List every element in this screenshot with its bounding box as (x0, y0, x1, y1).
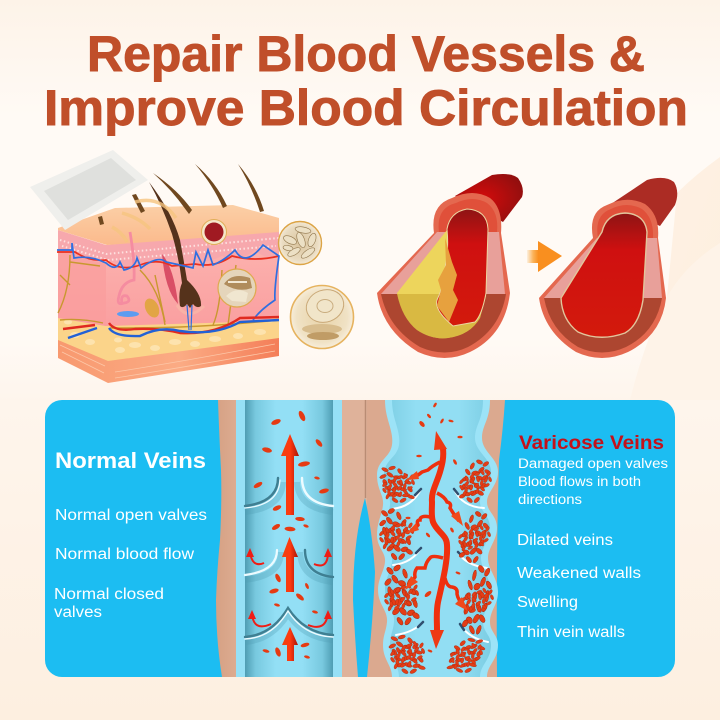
outer wall (377, 193, 510, 358)
valve shadows (245, 482, 333, 642)
branch arrow heads (405, 471, 468, 611)
normal closed valves: Normal closed (54, 586, 164, 603)
cut wall left (544, 238, 603, 298)
small curved side arrows (250, 552, 328, 627)
transdermal arrows (112, 200, 176, 242)
bulging vein interior (384, 400, 491, 677)
vein wall (236, 400, 342, 677)
cell clusters (379, 459, 494, 675)
back tube (611, 178, 677, 226)
left skin (216, 400, 236, 677)
sweat duct (118, 232, 134, 304)
lumen (561, 213, 647, 337)
follicle vessels (187, 305, 192, 330)
title: Improve Blood Circulation (44, 80, 688, 136)
blue gap between legs (353, 498, 375, 677)
artery before: plaque (377, 174, 523, 358)
herb circle: saffron (202, 220, 226, 244)
cut wall right (642, 238, 662, 298)
panel background (45, 400, 675, 677)
thin vein walls: Thin vein walls (517, 624, 625, 641)
right leg skin (367, 400, 505, 677)
herb circle: ginseng slices (290, 284, 354, 348)
plaque shade (397, 294, 486, 338)
weakened walls: Weakened walls (517, 565, 641, 582)
cut wall right (486, 232, 505, 294)
title (44, 26, 688, 136)
orange arrow (527, 241, 562, 272)
branch arrows (408, 462, 464, 606)
skin left face shade (58, 245, 106, 326)
back tube (455, 174, 523, 222)
bulging vein wall (377, 400, 498, 677)
large up arrow 3 (282, 627, 298, 661)
herb circle: mushroom (218, 269, 256, 307)
muscle fibres (60, 344, 275, 378)
main arrow heads (430, 431, 447, 649)
normal vein leg illustration (216, 400, 392, 677)
fat globules (64, 318, 274, 353)
skin cross-section diagram (57, 164, 279, 383)
deep red vessel (63, 317, 279, 333)
cut wall left (381, 232, 447, 294)
inner muscle top (597, 205, 653, 238)
inner muscle bottom (381, 294, 506, 352)
skin band specks (60, 238, 279, 260)
lumen (437, 209, 488, 326)
normal closed valves: valves (54, 604, 102, 621)
swelling: Swelling (517, 594, 578, 611)
large up arrow 2 (282, 537, 298, 592)
normal open valves: Normal open valves (55, 507, 207, 524)
skin pink band (58, 228, 279, 268)
inner muscle bottom (544, 298, 662, 352)
capillaries red (57, 252, 279, 268)
capillaries blue (57, 243, 279, 320)
fat lobule (142, 296, 162, 320)
large up arrow 1 (281, 434, 299, 515)
skin fat layer (58, 312, 279, 361)
damaged valves description: Blood flows in both (518, 474, 641, 489)
normal blood flow: Normal blood flow (55, 546, 195, 563)
title: Repair Blood Vessels & (87, 26, 645, 82)
inner muscle top (439, 199, 497, 232)
centre skin (342, 400, 392, 677)
hairs (98, 164, 264, 225)
damaged valves description: directions (518, 492, 582, 507)
panel text: varicose veins (517, 432, 668, 641)
valves (245, 478, 333, 639)
normal veins heading: Normal Veins (55, 448, 206, 473)
varicose veins heading: Varicose Veins (519, 432, 664, 454)
nerve ending (117, 311, 139, 317)
outer wall (539, 200, 666, 358)
patch (30, 150, 148, 230)
leg divider (364, 400, 366, 498)
plaque (397, 230, 486, 338)
herb circle: sliced root (278, 222, 322, 264)
damaged valves description: Damaged open valves (518, 456, 668, 471)
skin muscle layer (58, 336, 279, 383)
main wavy arrow (432, 449, 447, 630)
skin epidermis top (58, 205, 279, 245)
nerves (58, 255, 279, 328)
artery after: clear (539, 178, 677, 358)
sebaceous gland (162, 254, 178, 304)
panel text: normal veins (54, 448, 207, 621)
damaged valves (392, 489, 488, 642)
deep blue vessel (68, 320, 279, 338)
main hair follicle (149, 182, 201, 308)
dilated veins: Dilated veins (517, 532, 613, 549)
vein interior (245, 400, 333, 677)
panel: veins comparison (45, 400, 675, 677)
loose cells (406, 402, 463, 653)
skin dermis layer (58, 245, 279, 326)
follicle sheath (177, 305, 204, 314)
rough plaque edge (437, 238, 458, 322)
small arrowheads (246, 548, 332, 619)
varicose vein leg illustration (353, 400, 505, 677)
red blood cells (253, 410, 329, 659)
